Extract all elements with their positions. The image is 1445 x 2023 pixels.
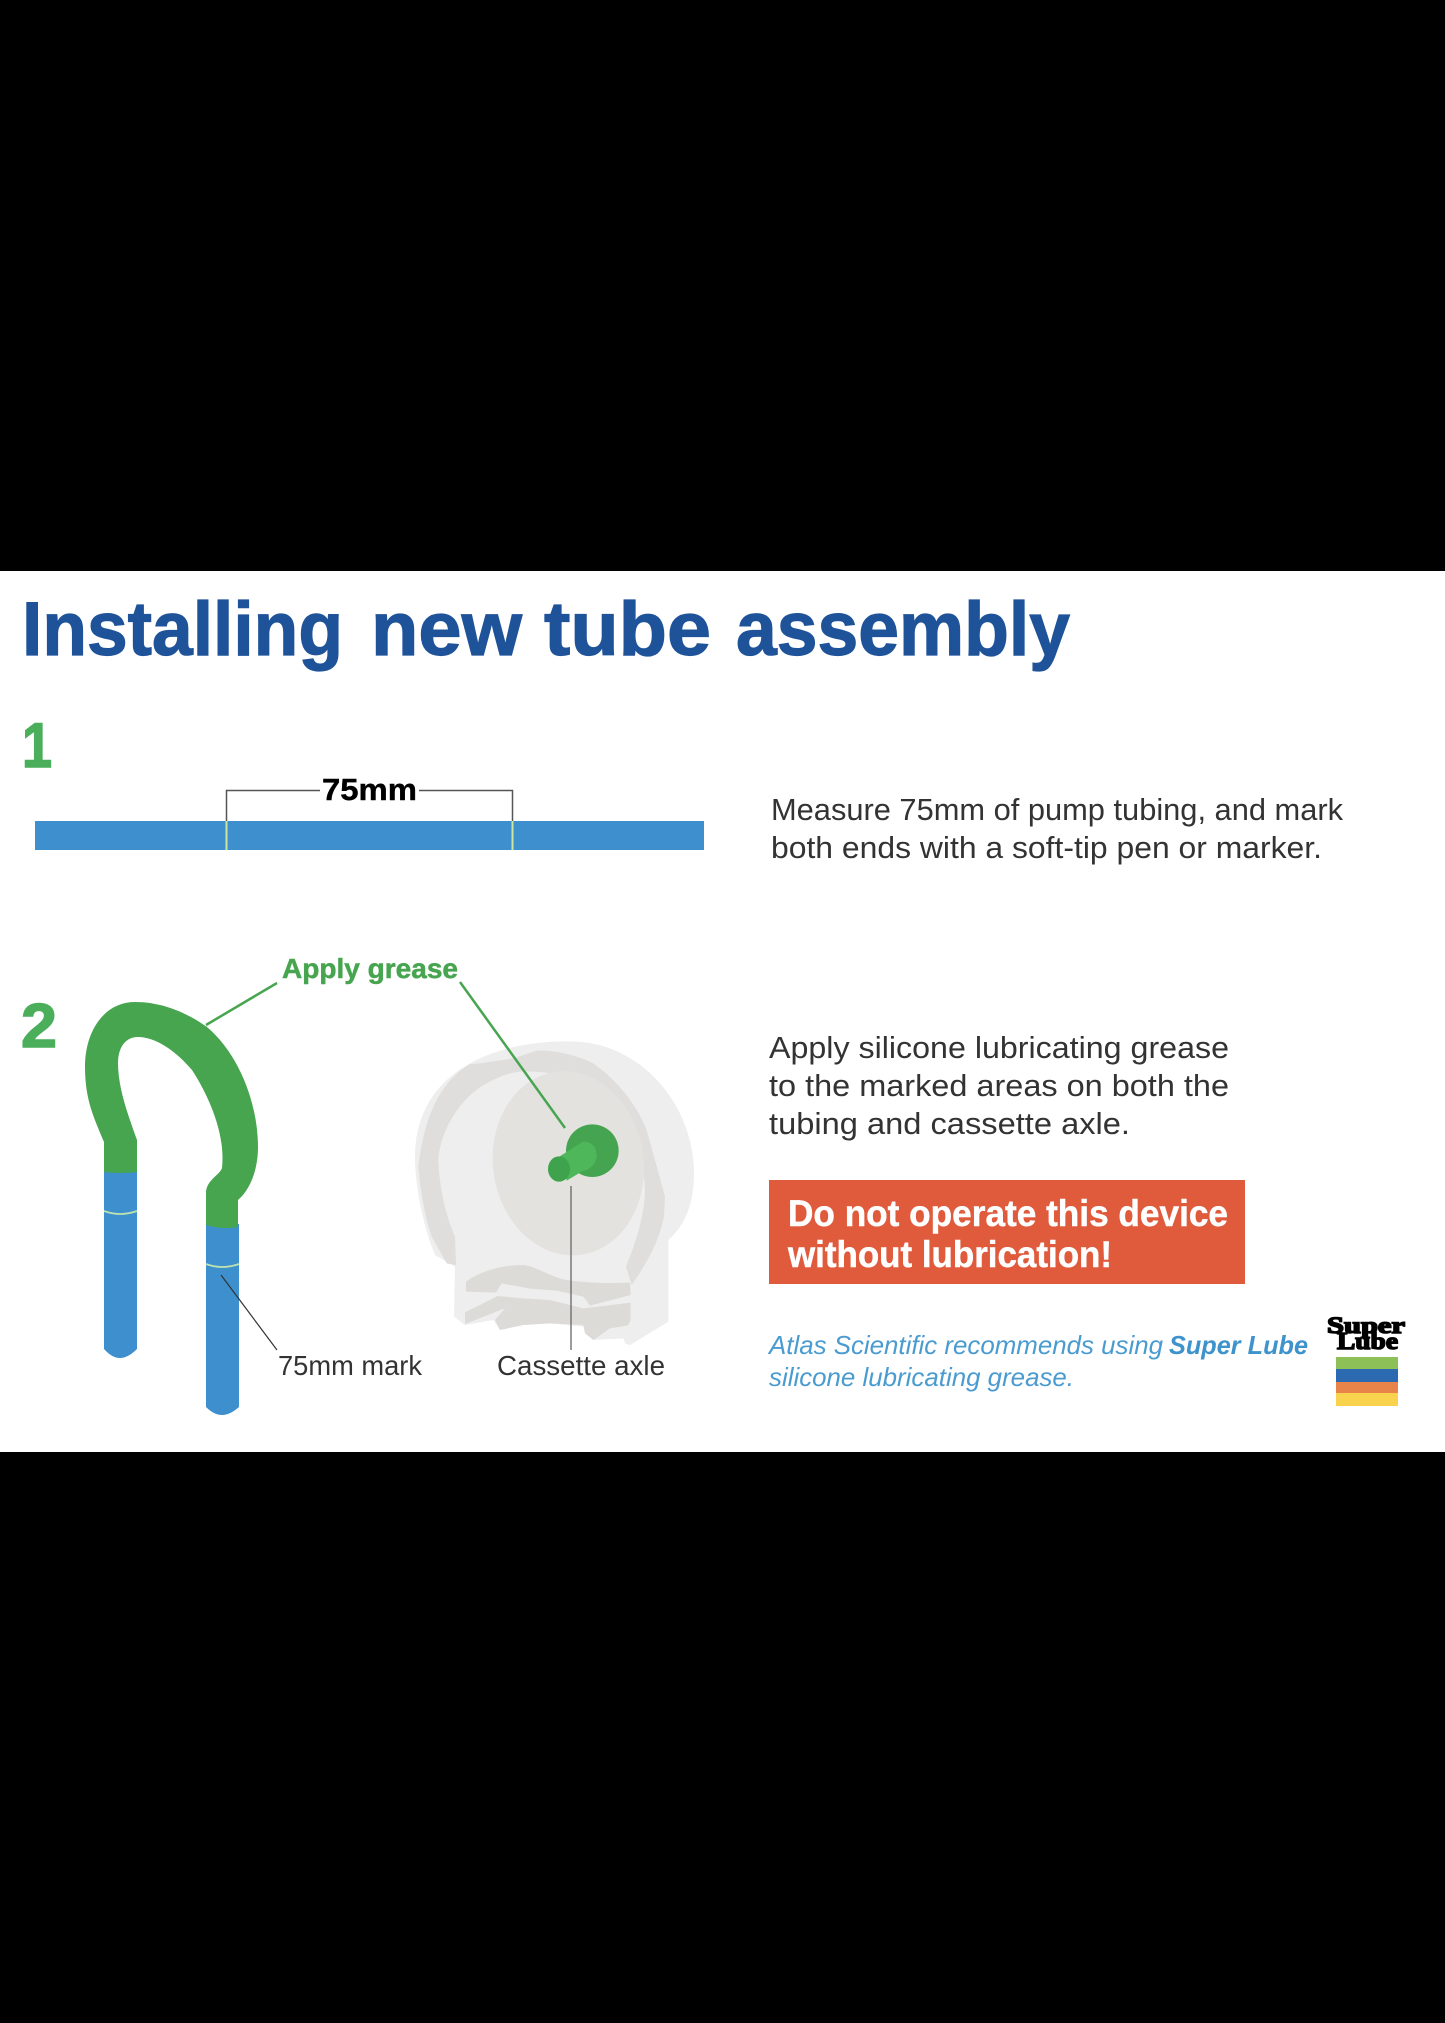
step 1 instructions: Measure 75mm of pump tubing, and mark — [771, 792, 1343, 827]
right tube end — [206, 1224, 239, 1415]
recommendation note: silicone lubricating grease. — [769, 1362, 1074, 1392]
step number 1: 1 — [22, 711, 52, 781]
tube marks — [104, 1211, 239, 1267]
apply grease label: Apply grease — [282, 953, 458, 984]
panel: step 1 — [22, 711, 1352, 865]
title: Installing — [22, 587, 343, 672]
title: tube — [544, 587, 711, 672]
cassette axle label: Cassette axle — [497, 1350, 665, 1381]
title: assembly — [736, 587, 1070, 672]
leader line 75mm mark — [221, 1275, 277, 1350]
step number 2: 2 — [21, 992, 57, 1061]
cassette lower ribs — [465, 1265, 631, 1340]
leader line cassette axle — [570, 1186, 572, 1350]
cassette axle — [548, 1124, 619, 1182]
cassette front panel — [624, 1240, 668, 1345]
cassette ring — [418, 1051, 665, 1285]
Super Lube logo: Super — [1327, 1313, 1405, 1338]
greased section — [85, 1002, 258, 1228]
75mm mark label: 75mm mark — [278, 1350, 423, 1381]
cassette inner disc — [481, 1061, 656, 1265]
Super Lube logo: Lube — [1337, 1329, 1398, 1355]
dimension bracket — [226, 790, 512, 821]
step 2 instructions: Apply silicone lubricating grease — [769, 1030, 1229, 1065]
title: new — [371, 587, 523, 672]
panel: step 2 — [21, 953, 1405, 1415]
recommendation note: Atlas Scientific recommends using — [767, 1330, 1164, 1360]
step 2 instructions: to the marked areas on both the — [769, 1068, 1229, 1103]
dimension label: 75mm — [322, 772, 417, 807]
bent tube with grease — [85, 1002, 258, 1415]
warning callout: Do not operate this device — [788, 1193, 1228, 1234]
left tube end — [104, 1170, 137, 1358]
step 1 instructions: both ends with a soft-tip pen or marker. — [771, 830, 1322, 865]
cassette body — [415, 1041, 694, 1345]
straight tube with 75mm marks — [35, 821, 704, 850]
cassette illustration — [415, 1041, 694, 1345]
step 2 instructions: tubing and cassette axle. — [769, 1106, 1130, 1141]
leader line to tube — [206, 983, 277, 1025]
Super Lube logo — [1327, 1313, 1405, 1406]
leader line to axle — [460, 982, 565, 1128]
warning callout — [769, 1180, 1245, 1284]
warning callout: without lubrication! — [787, 1234, 1112, 1275]
recommendation note: Super Lube — [1169, 1330, 1308, 1360]
